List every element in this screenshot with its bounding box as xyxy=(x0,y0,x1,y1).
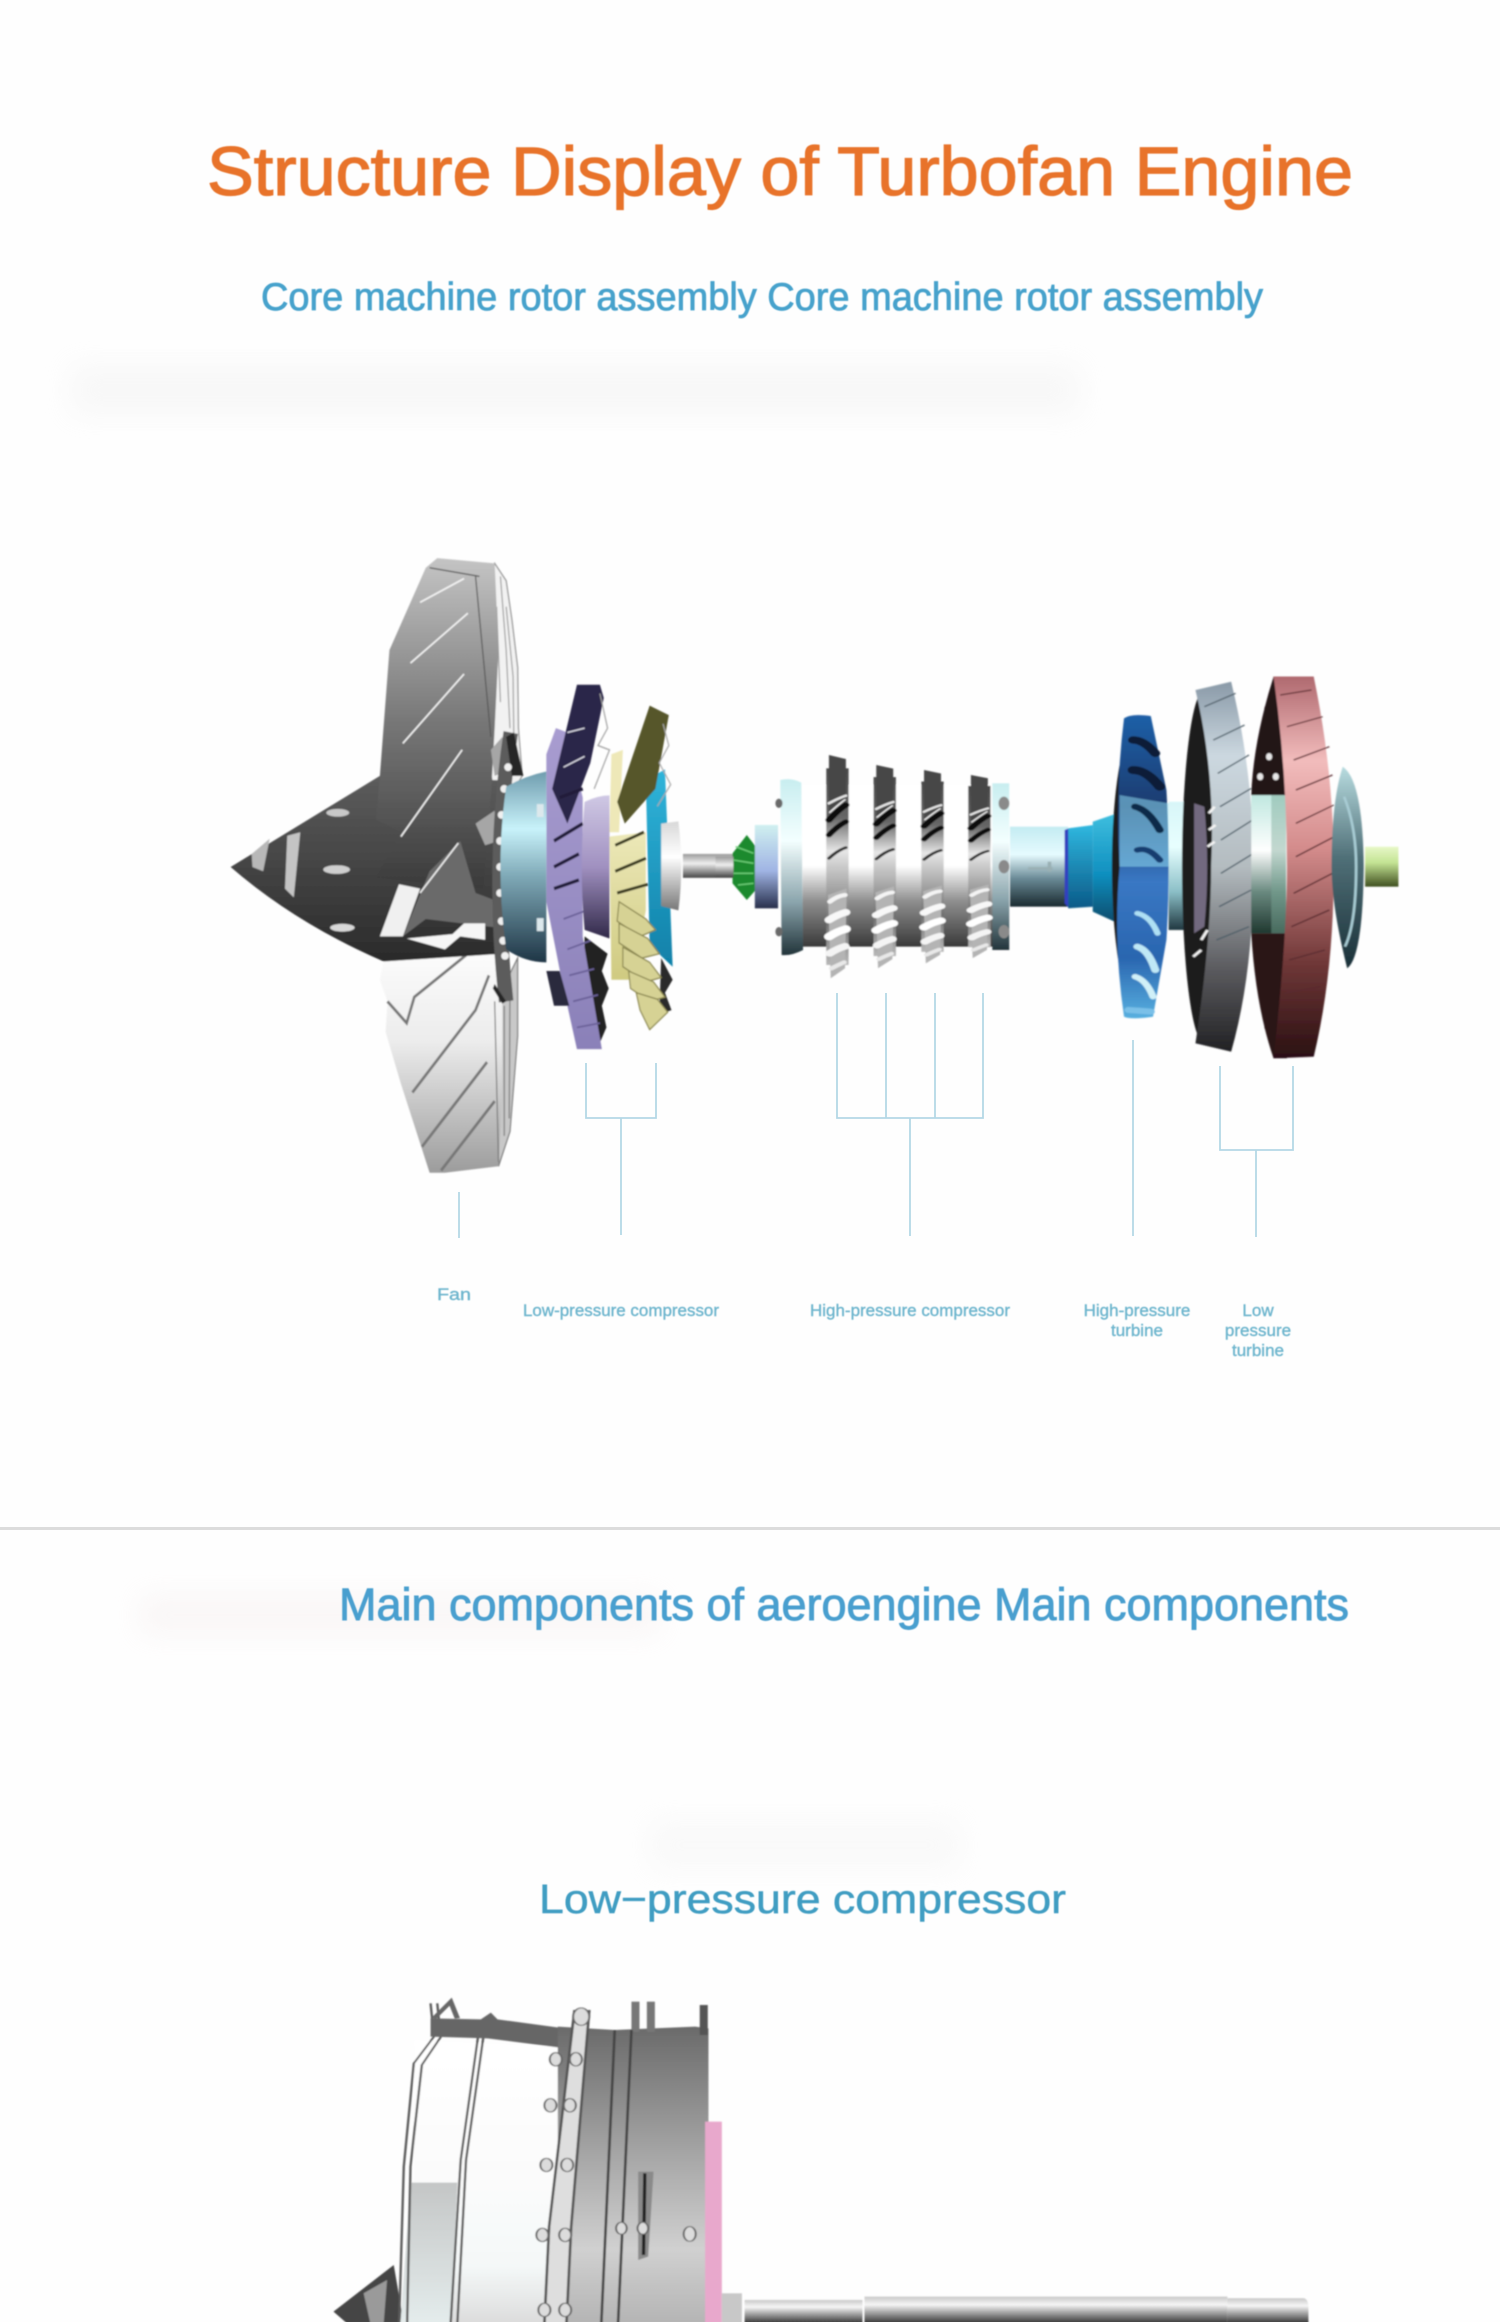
hub and connecting shaft xyxy=(661,821,737,910)
connecting duct xyxy=(1010,827,1068,907)
label: Low-pressure compressor: Low-pressure compressor xyxy=(523,1301,719,1320)
label: High-pressure compressor: High-pressure compressor xyxy=(810,1301,1010,1320)
open front casing xyxy=(399,2002,558,2322)
high-pressure compressor and turbines xyxy=(716,677,1399,1058)
low-pressure turbine drum xyxy=(1251,795,1286,933)
fan assembly and low-pressure compressor xyxy=(231,558,737,1173)
faint background smudges xyxy=(70,365,1080,1870)
high-pressure compressor drum xyxy=(775,779,1009,955)
purple compressor stage xyxy=(546,685,609,1049)
label: Low pressure turbine: pressure xyxy=(1225,1321,1291,1340)
label: Low pressure turbine: turbine xyxy=(1232,1341,1284,1360)
high-pressure compressor hub xyxy=(755,825,778,908)
leader lines for component labels xyxy=(459,993,1293,1238)
heading: main components of aeroengine: Main components of aeroengine Main components xyxy=(339,1579,1349,1630)
rear casing body xyxy=(558,2002,708,2322)
compressor blade stage 4 xyxy=(968,775,991,958)
dark upper strut xyxy=(431,2013,564,2047)
pink rotor strip xyxy=(705,2122,722,2322)
blue hub and cone xyxy=(1065,812,1122,925)
title: Structure Display of Turbofan Engine xyxy=(207,133,1353,210)
label: High-pressure turbine: turbine xyxy=(1111,1321,1163,1340)
compressor blade stage 2 xyxy=(874,765,896,968)
mid-turbine drum xyxy=(1169,802,1193,930)
fan lower blades xyxy=(380,934,502,1173)
high-pressure turbine disc xyxy=(1112,715,1169,1018)
rear end cone xyxy=(1332,767,1364,968)
low-pressure compressor illustration xyxy=(333,2002,1308,2322)
light blue compressor drum xyxy=(500,772,546,962)
bolted flange xyxy=(536,2008,696,2322)
output shaft xyxy=(722,2293,1308,2322)
label: High-pressure turbine: High-pressure xyxy=(1084,1301,1190,1320)
purple drum xyxy=(582,795,609,939)
label: Low pressure turbine: Low xyxy=(1242,1301,1274,1320)
fan upper blade xyxy=(376,558,499,889)
bolted fan ring xyxy=(493,733,523,1004)
compressor blade stage 3 xyxy=(921,770,944,963)
spinner nose cone xyxy=(231,776,502,962)
fan rear blade outlines xyxy=(468,563,522,1166)
sky blue compressor disc xyxy=(646,769,673,1014)
label: Fan: Fan xyxy=(437,1285,471,1304)
fan centre blade highlights xyxy=(380,737,506,949)
subtitle: core machine rotor assembly: Core machine rotor assembly Core machine rotor assembly xyxy=(261,276,1263,319)
low-pressure turbine first disc xyxy=(1182,682,1253,1052)
green bevel gear xyxy=(716,835,756,900)
heading: low-pressure compressor: Low−pressure compressor xyxy=(539,1876,1066,1922)
low-pressure turbine second disc xyxy=(1251,677,1334,1058)
nose cone tip xyxy=(333,2265,404,2322)
yellow compressor stage xyxy=(609,706,671,1030)
compressor blade stage 1 xyxy=(826,755,849,978)
section divider xyxy=(0,1527,1500,1530)
exploded engine rotor diagram xyxy=(231,558,1399,1173)
tail shaft xyxy=(1365,847,1399,887)
